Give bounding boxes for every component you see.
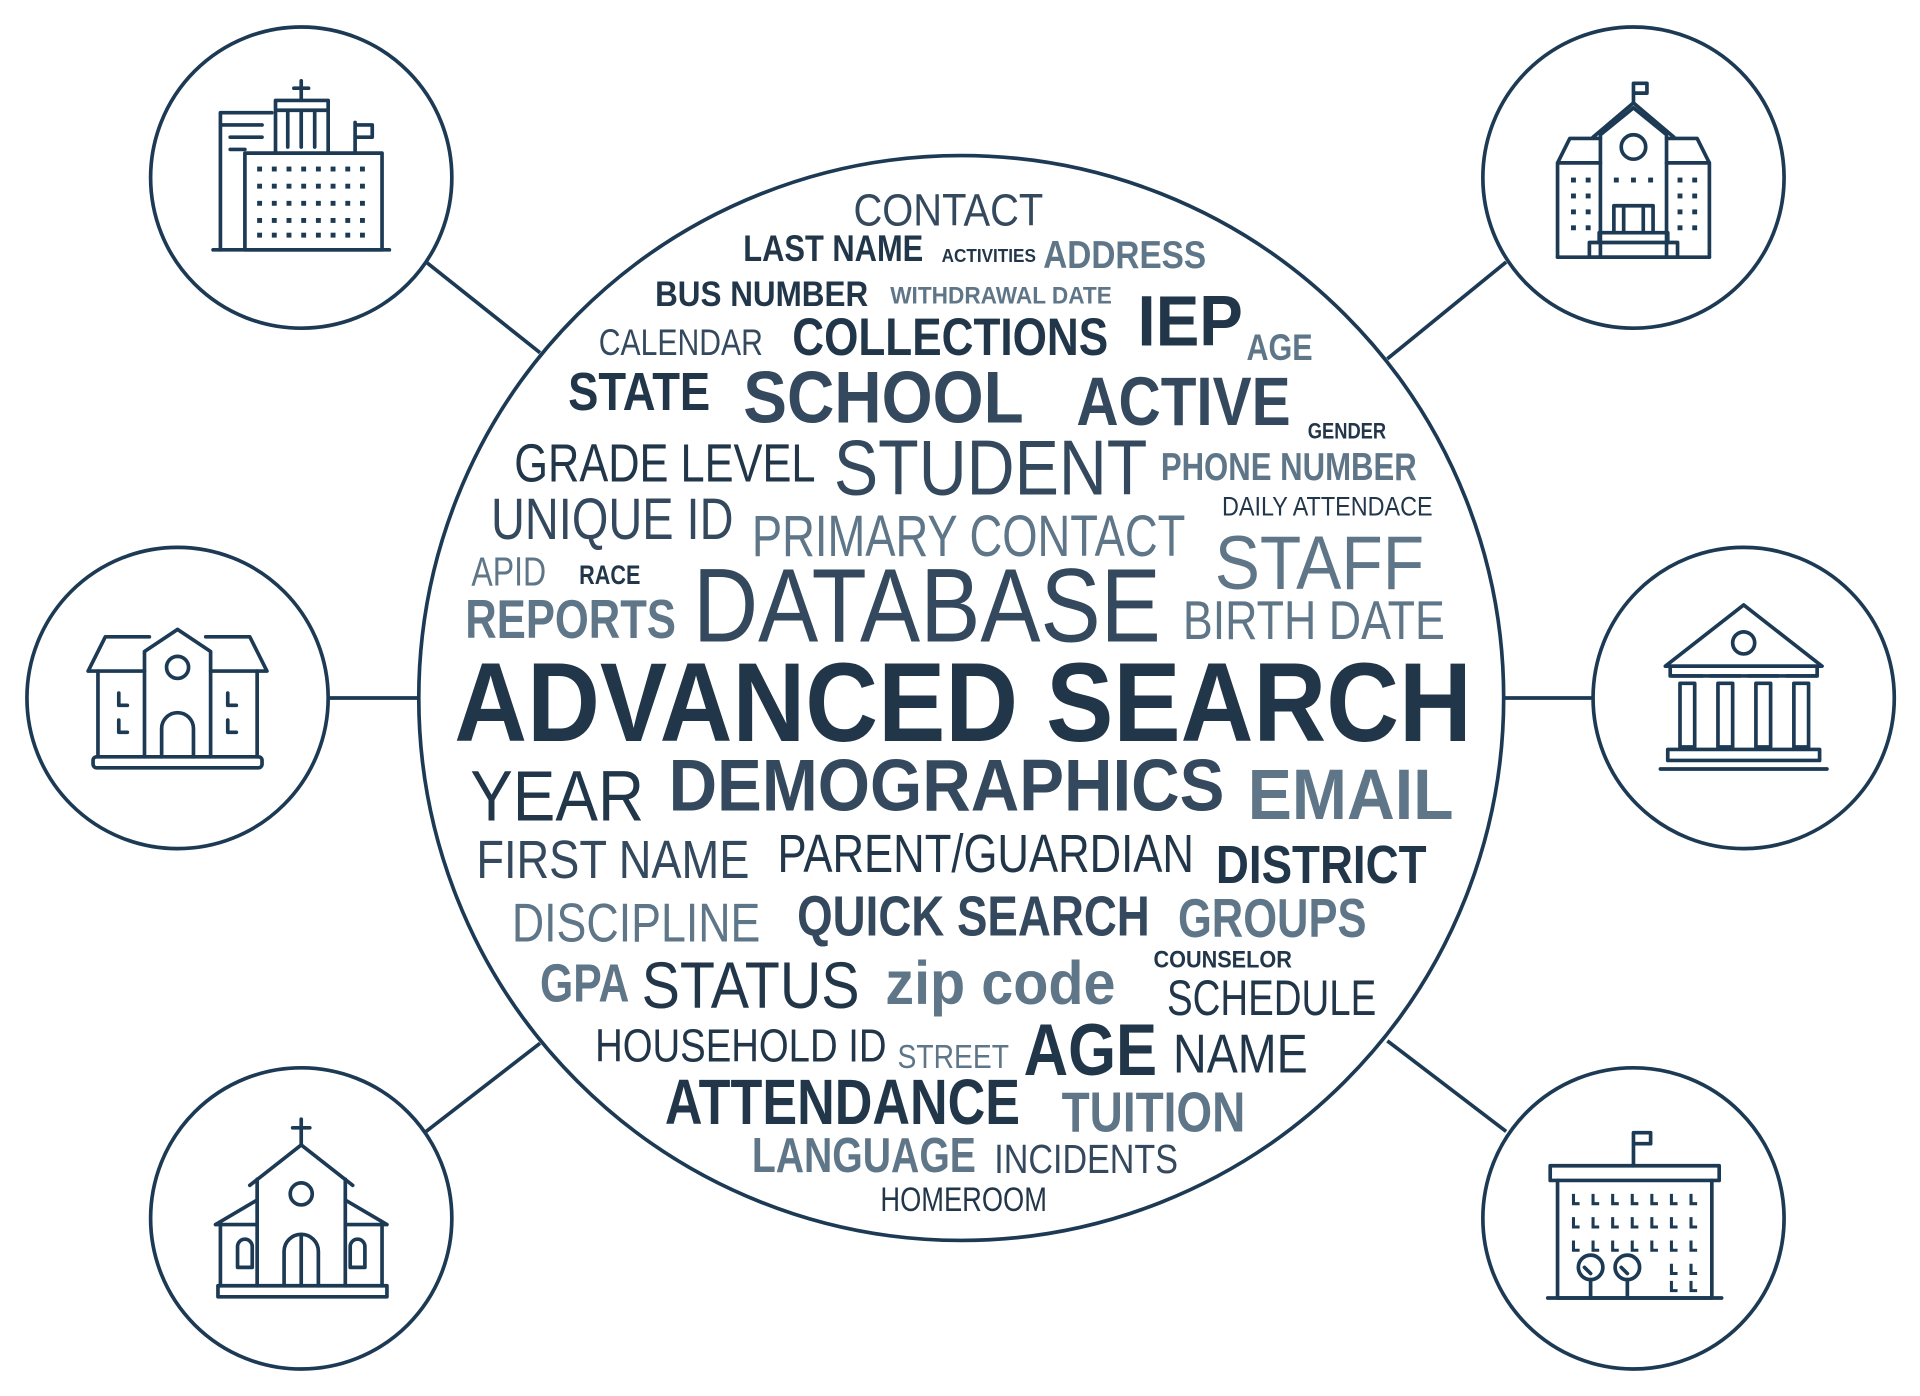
- icon circle: top-right school with tower: [1483, 27, 1784, 328]
- main circle: word cloud: NAME: [1173, 1023, 1308, 1085]
- main circle: word cloud: APID: [471, 548, 546, 594]
- icon circle: top-left office building: [151, 27, 452, 328]
- main circle: word cloud: INCIDENTS: [994, 1136, 1178, 1182]
- main circle: word cloud: CONTACT: [853, 184, 1043, 235]
- main circle: word cloud: REPORTS: [465, 588, 676, 650]
- main circle: word cloud: STATUS: [642, 949, 860, 1023]
- main circle: word cloud: ACTIVE: [1076, 363, 1291, 440]
- main circle: word cloud: PHONE NUMBER: [1161, 446, 1417, 489]
- main circle: word cloud: PARENT/GUARDIAN: [778, 824, 1194, 884]
- main circle: word cloud: COUNSELOR: [1153, 946, 1292, 973]
- icon circle: bottom-right building with trees: [1483, 1068, 1784, 1369]
- main circle: word cloud: DISTRICT: [1216, 835, 1427, 895]
- main circle: word cloud: RACE: [579, 560, 640, 590]
- main circle: word cloud: LAST NAME: [743, 228, 923, 269]
- icon circle: bottom-left church: [151, 1068, 452, 1369]
- main circle: word cloud: HOMEROOM: [880, 1181, 1047, 1219]
- icon circle: middle-right bank: [1593, 547, 1894, 849]
- main circle: word cloud: DISCIPLINE: [512, 892, 760, 954]
- main circle: word cloud: GPA: [540, 954, 629, 1014]
- main circle: word cloud: STATE: [568, 362, 710, 422]
- main circle: word cloud: FIRST NAME: [476, 830, 749, 890]
- main circle: word cloud: EMAIL: [1248, 756, 1453, 835]
- icon circle: middle-left schoolhouse: [27, 547, 328, 849]
- main circle: word cloud: IEP: [1138, 282, 1243, 361]
- main circle: word cloud: BUS NUMBER: [655, 274, 868, 314]
- main circle: word cloud: CALENDAR: [599, 322, 763, 363]
- main circle: word cloud: DEMOGRAPHICS: [669, 744, 1224, 827]
- main circle: word cloud: SCHEDULE: [1167, 970, 1376, 1026]
- main circle: word cloud: ADDRESS: [1043, 234, 1206, 277]
- main circle: word cloud: SCHOOL: [743, 355, 1024, 438]
- main circle: word cloud: PRIMARY CONTACT: [752, 504, 1185, 569]
- main circle: word cloud: UNIQUE ID: [491, 487, 733, 552]
- main circle: word cloud: STREET: [898, 1039, 1009, 1076]
- connector lines: [328, 262, 1592, 1131]
- main circle: word cloud: YEAR: [470, 757, 644, 836]
- main circle: word cloud: COLLECTIONS: [792, 308, 1108, 367]
- main circle: word cloud: QUICK SEARCH: [797, 885, 1150, 948]
- main circle: word cloud: GENDER: [1308, 418, 1386, 443]
- main circle: word cloud: HOUSEHOLD ID: [595, 1020, 887, 1072]
- main circle: word cloud: zip code: [885, 949, 1116, 1017]
- main circle: word cloud: [419, 156, 1504, 1240]
- main circle: word cloud: ACTIVITIES: [942, 245, 1036, 266]
- main circle: word cloud: STAFF: [1215, 521, 1424, 606]
- main circle: word cloud: ATTENDANCE: [665, 1067, 1020, 1138]
- main circle: word cloud: WITHDRAWAL DATE: [890, 283, 1112, 310]
- main circle: word cloud: AGE: [1024, 1008, 1157, 1091]
- main circle: word cloud: DAILY ATTENDACE: [1222, 492, 1433, 522]
- main circle: word cloud: LANGUAGE: [752, 1129, 976, 1183]
- main circle: word cloud: GRADE LEVEL: [514, 433, 816, 493]
- main circle: word cloud: GROUPS: [1178, 887, 1367, 949]
- main circle: word cloud: AGE: [1247, 327, 1313, 368]
- main circle: word cloud: TUITION: [1062, 1080, 1245, 1143]
- main circle: word cloud: STUDENT: [834, 424, 1147, 512]
- main circle: word cloud: ADVANCED SEARCH: [454, 639, 1472, 765]
- main circle: word cloud: BIRTH DATE: [1183, 589, 1445, 651]
- main circle: word cloud: DATABASE: [693, 548, 1161, 665]
